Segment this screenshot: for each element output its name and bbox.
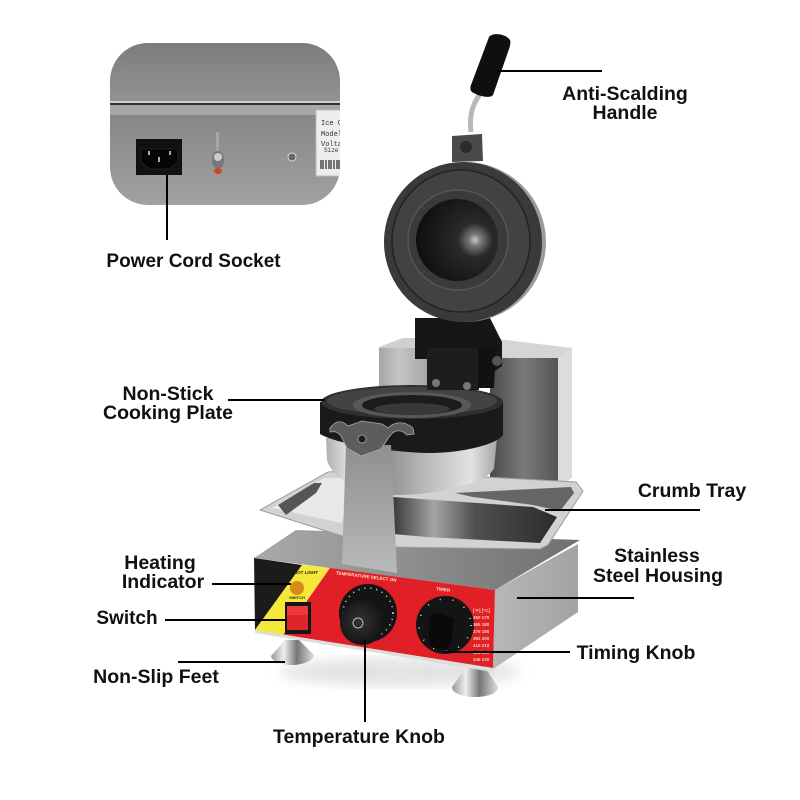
temperature scale table <box>473 608 490 662</box>
temperature scale table: 375 190 <box>473 629 490 634</box>
temperature knob <box>340 601 384 645</box>
latch <box>330 421 414 456</box>
base top face <box>254 530 580 590</box>
temperature dial <box>339 584 397 645</box>
label: non-stick cooking plate: Cooking Plate <box>103 402 233 424</box>
anti-scalding handle <box>452 34 510 162</box>
lid: upper plate disc <box>384 162 546 322</box>
label: crumb tray: Crumb Tray <box>638 480 746 502</box>
yellow panel segment <box>255 565 330 635</box>
temperature scale table: 365 180 <box>473 622 490 627</box>
silver bowl under plate <box>326 438 497 495</box>
base side face <box>493 544 578 669</box>
label: power cord socket: Power Cord Socket <box>106 251 281 272</box>
hinge bracket <box>415 318 502 390</box>
red control panel <box>283 568 495 668</box>
label: switch: Switch <box>96 608 158 629</box>
panel: power cord socket inset photo <box>110 43 359 205</box>
non-stick cooking plate <box>320 385 503 453</box>
temperature scale table: 350 170 <box>473 615 490 620</box>
black panel segment <box>254 558 302 630</box>
icon: product label sticker: Voltage <box>321 141 350 149</box>
icon: heating indicator <box>290 581 304 595</box>
leader lines <box>165 71 700 722</box>
temperature scale table: 446 230 <box>473 657 490 662</box>
label: non-slip feet: Non-Slip Feet <box>93 666 219 688</box>
infographic canvas <box>94 34 746 747</box>
icon: power socket <box>136 139 182 175</box>
machine base <box>254 530 580 672</box>
crumb tray <box>260 470 583 549</box>
shadow <box>280 658 520 686</box>
icon: product label sticker: Ice Cream <box>321 120 359 128</box>
icon: product label sticker: Model <box>321 131 342 139</box>
label: anti-scalding handle: Handle <box>592 102 658 124</box>
temperature scale table: [°F] [°C] <box>473 608 490 613</box>
label: stainless steel housing: Steel Housing <box>593 565 723 587</box>
timer dial <box>416 596 474 654</box>
right foot <box>452 666 498 697</box>
label: heating indicator: Heating <box>124 552 196 574</box>
temperature scale table: 392 200 <box>473 636 490 641</box>
icon: product label sticker: Size <box>324 147 339 154</box>
temperature scale table: 410 210 <box>473 643 490 648</box>
temperature scale table: 428 220 <box>473 650 490 655</box>
left foot <box>271 640 314 665</box>
product: burger waffle machine <box>254 34 583 697</box>
temperature select label: TEMPERATURE SELECT OH <box>336 570 397 583</box>
icon: product label sticker <box>316 110 340 176</box>
switch label: SWITCH <box>289 595 305 600</box>
timing knob <box>429 613 454 650</box>
front support arm <box>342 445 397 573</box>
label: timing knob: Timing Knob <box>577 642 695 664</box>
icon: power switch <box>285 602 311 634</box>
hot light label: HOT LIGHT <box>294 570 318 575</box>
panel bottom edge <box>255 630 493 672</box>
label: temperature knob: Temperature Knob <box>273 726 445 748</box>
icon: fuse holder toggle <box>212 132 224 174</box>
label: anti-scalding handle: Anti-Scalding <box>562 83 688 105</box>
back panel <box>379 338 572 486</box>
label: stainless steel housing: Stainless <box>614 545 700 567</box>
label: heating indicator: Indicator <box>122 571 205 593</box>
icon: screw <box>288 153 296 161</box>
timer label: TIMER <box>436 586 451 593</box>
label: non-stick cooking plate: Non-Stick <box>122 383 214 405</box>
